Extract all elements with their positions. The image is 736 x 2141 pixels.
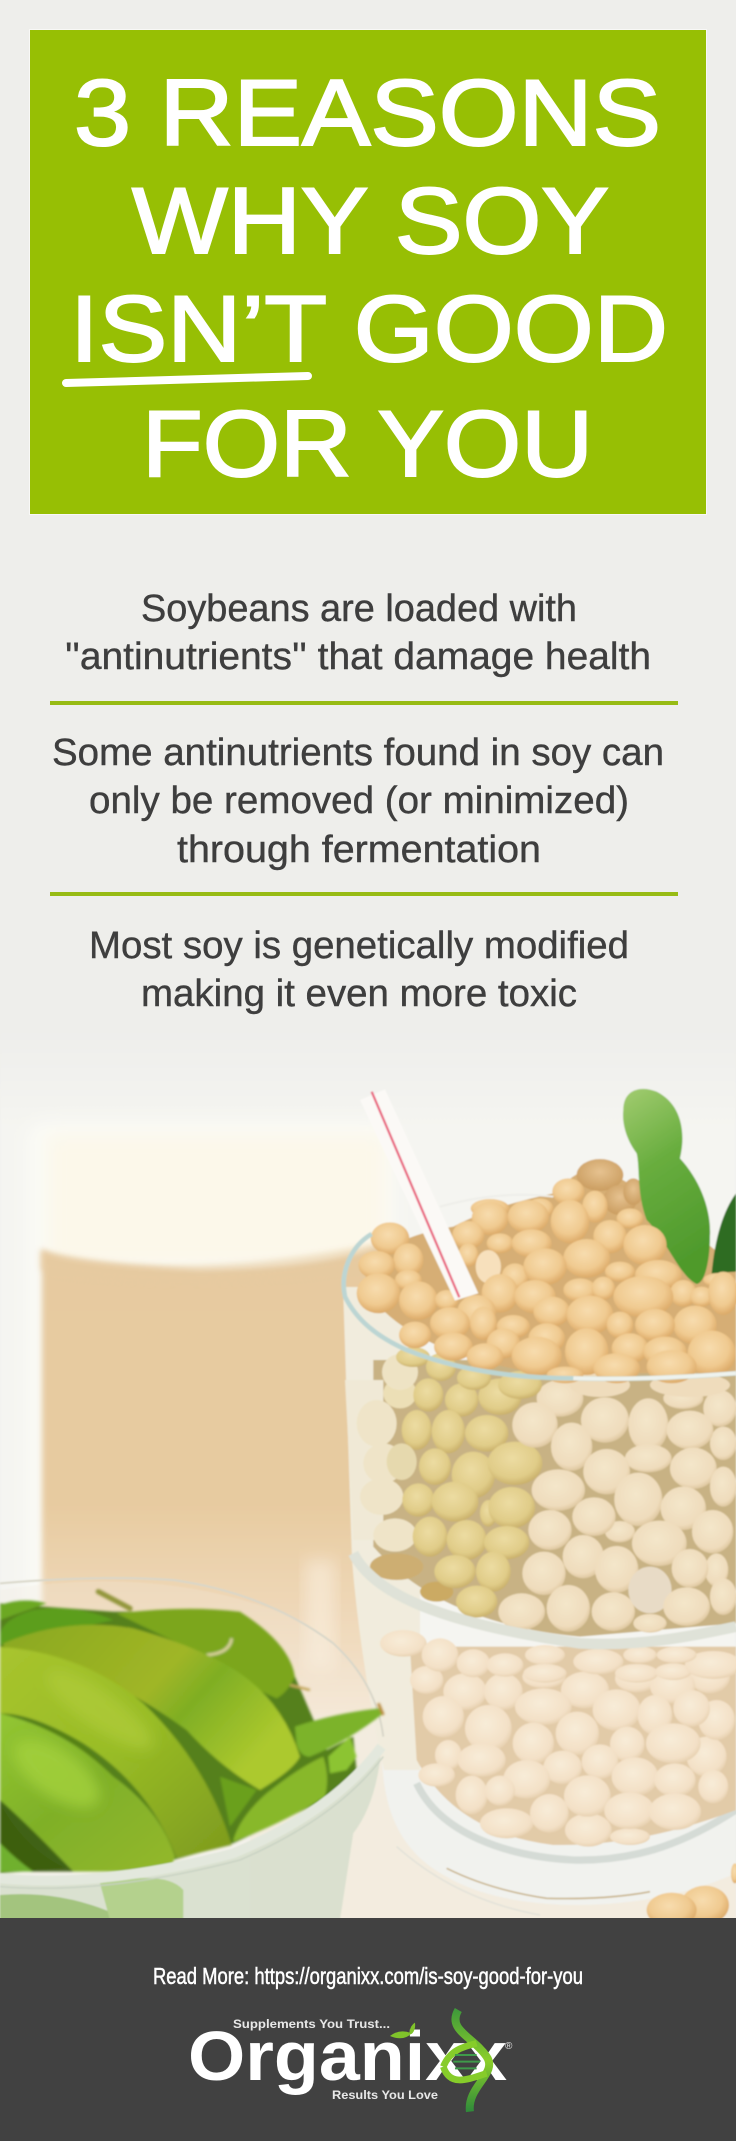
bowl lower glass — [0, 1747, 382, 1920]
title text — [70, 60, 668, 496]
Organixx logo: Organixx — [188, 2017, 507, 2095]
read more link: Read More: https://organixx.com/is-soy-good-for-you — [153, 1963, 583, 1989]
title text: ISN’T GOOD — [70, 276, 668, 381]
glass bowl of edamame — [0, 1578, 383, 1920]
edamame pods — [0, 1592, 383, 1873]
reason 1 — [65, 588, 651, 678]
Organixx logo: ® — [505, 2041, 513, 2052]
glass of soybeans — [343, 1089, 736, 1927]
reason 3: making it even more toxic — [141, 973, 577, 1015]
reason 2: through fermentation — [177, 829, 541, 871]
Organixx logo: Results You Love — [332, 2090, 438, 2102]
beans in middle of glass — [345, 1360, 736, 1683]
title text: WHY SOY — [132, 168, 609, 273]
title text: 3 REASONS — [74, 60, 661, 165]
glass base — [382, 1660, 736, 1915]
glass seam ring — [353, 1553, 736, 1644]
pale beans in lower glass — [410, 1647, 736, 1847]
text panel: three reasons — [50, 588, 678, 1015]
glass wall — [343, 1287, 420, 1770]
reason 1: ''antinutrients'' that damage health — [65, 636, 651, 678]
footer bar — [0, 1918, 736, 2141]
reason 3: Most soy is genetically modified — [89, 925, 629, 967]
drinking straw — [360, 1089, 478, 1301]
bowl front rim — [0, 1747, 382, 1881]
reason 2: only be removed (or minimized) — [89, 780, 629, 822]
leaf: soybean leaf — [623, 1089, 710, 1284]
loose soybeans on table — [647, 1863, 736, 1927]
beans below seam — [380, 1630, 736, 1683]
photo: soy milk, soybeans and edamame — [0, 1030, 736, 1927]
soybeans at top of glass — [344, 1089, 736, 1383]
reason 2: Some antinutrients found in soy can — [52, 732, 664, 774]
Organixx logo: Supplements You Trust... — [233, 2019, 390, 2031]
reason 3 — [89, 925, 629, 1015]
soy milk glass — [26, 1120, 396, 1720]
title banner — [29, 29, 707, 515]
title text: FOR YOU — [142, 391, 593, 496]
leaf: back dark — [712, 1193, 736, 1273]
hand-drawn underline — [66, 376, 308, 383]
glass rim — [344, 1195, 736, 1379]
icon: DNA helix and leaves — [390, 2010, 489, 2112]
reason 2 — [52, 732, 664, 871]
beans just under rim — [382, 1347, 730, 1399]
reason 1: Soybeans are loaded with — [141, 588, 577, 630]
